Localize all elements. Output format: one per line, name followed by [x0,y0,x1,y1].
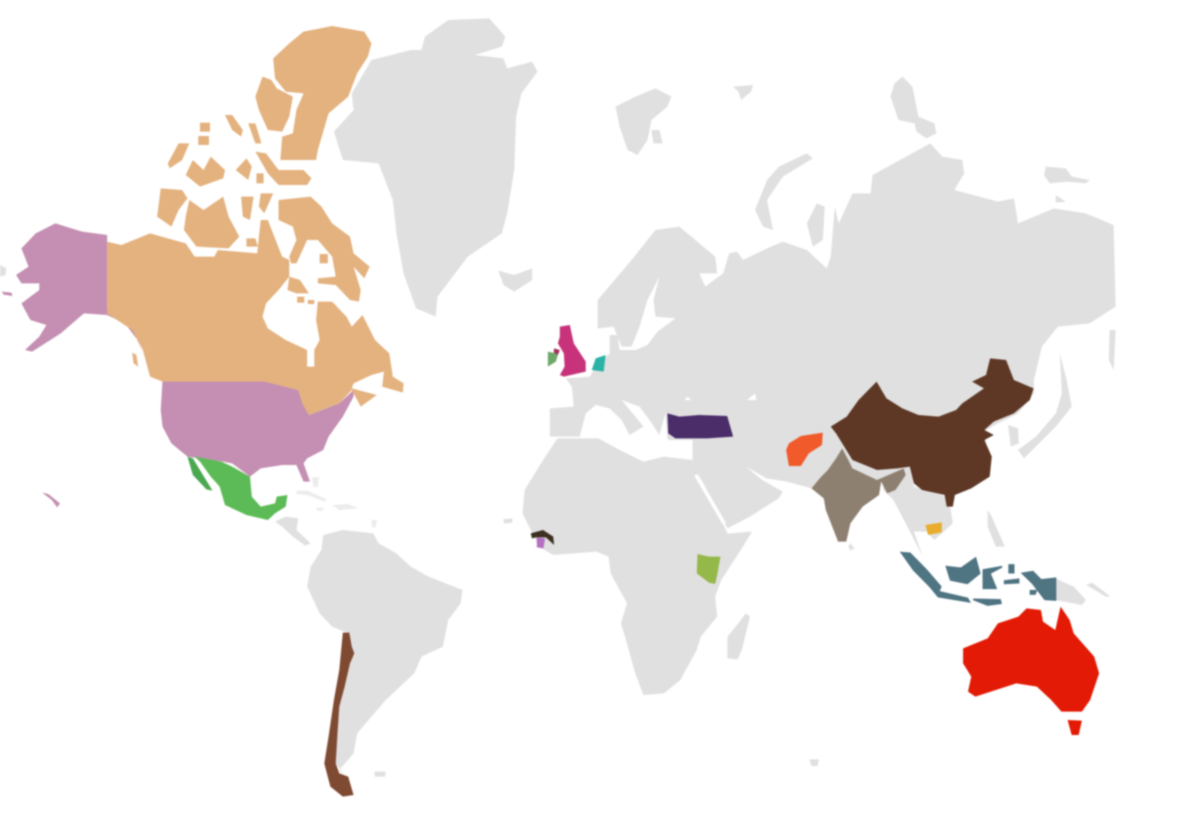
country: Ireland [548,352,558,367]
country: Mexico [187,457,287,520]
landmass: Africa, Arabia and South-East Asia [503,400,1111,766]
country: India [811,448,906,542]
country: Canada [107,26,404,415]
country: Australia [963,607,1099,735]
countries: West Africa pair [531,530,554,548]
country: Indonesia [902,553,1055,605]
country: Chile [324,633,354,797]
country: Kenya [697,554,720,584]
landmass: Greenland and Iceland [0,18,537,317]
country: China [831,358,1034,507]
country: Alaska and USA [2,223,354,507]
country: Cambodia [925,522,942,535]
landmass: Eurasia [550,77,1116,480]
country: Afghanistan [786,433,823,466]
landmass: South and Central America [275,477,462,777]
country: Netherlands [592,355,606,372]
country: United Kingdom [554,325,586,377]
country: Turkey [667,413,733,438]
